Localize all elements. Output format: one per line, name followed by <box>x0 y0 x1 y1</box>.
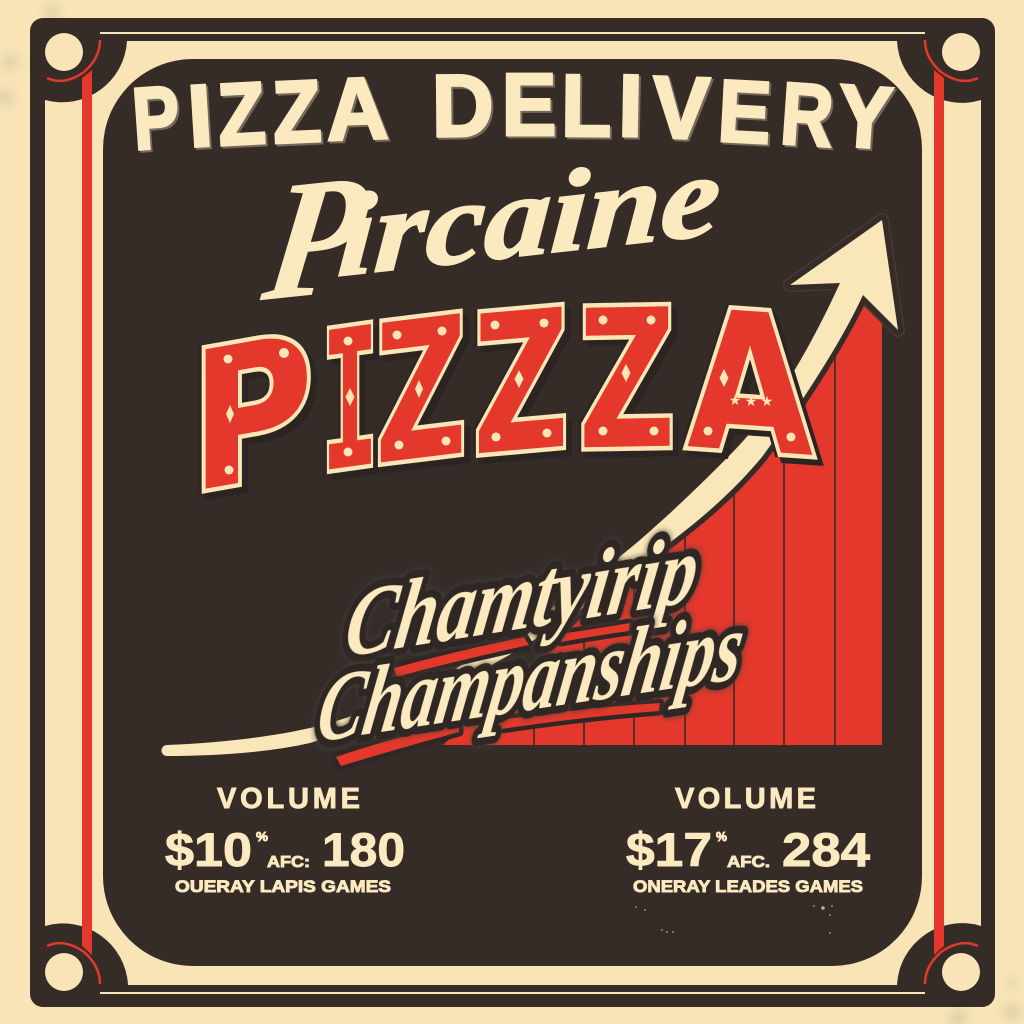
title: PIZZA DELIVERY: Z <box>270 61 323 162</box>
red letter faces: Z <box>473 268 569 498</box>
rising bar chart <box>443 290 882 745</box>
stat block left: % <box>256 829 268 844</box>
stat block right: % <box>716 829 727 844</box>
title: PIZZA DELIVERY: Z <box>215 63 268 164</box>
stars on letter A: ★ <box>745 394 757 410</box>
red letter faces: Z <box>376 276 466 509</box>
stat block right: AFC. <box>727 854 770 871</box>
corner: bottom right <box>897 923 981 991</box>
label: VOLUME <box>217 783 360 815</box>
script heading: Pircaine: P <box>254 137 379 337</box>
red side bars <box>82 70 944 955</box>
stars on letter A <box>729 393 773 410</box>
wordmark dots <box>224 316 796 474</box>
script heading: Pircaine <box>254 130 724 337</box>
red letter faces: A <box>688 269 812 500</box>
title: PIZZA DELIVERY: I <box>617 56 644 155</box>
stat block left <box>165 783 405 896</box>
varsity wordmark: PIZZA: P <box>191 294 313 536</box>
stat block right <box>626 783 870 896</box>
stars on letter A: ★ <box>729 393 741 409</box>
title: PIZZA DELIVERY: E <box>716 61 774 162</box>
title: PIZZA DELIVERY: Y <box>835 65 896 168</box>
stars on letter A: ★ <box>761 394 773 410</box>
title: PIZZA DELIVERY: I <box>185 65 215 166</box>
stat block right: 284 <box>782 823 870 876</box>
corner: top right <box>897 33 981 103</box>
red swashes <box>336 623 660 766</box>
red letter faces <box>191 268 812 536</box>
varsity wordmark: PIZZA: A <box>688 269 812 500</box>
title: PIZZA DELIVERY: R <box>778 65 836 166</box>
red letter faces: I <box>321 287 379 515</box>
varsity wordmark: PIZZA <box>191 268 812 536</box>
corner: bottom left <box>45 923 128 991</box>
stat block left: 180 <box>322 823 405 876</box>
frame rules <box>100 32 925 994</box>
caption: OUERAY LAPIS GAMES <box>175 877 391 896</box>
value: $10 <box>165 823 252 876</box>
red letter faces: P <box>191 294 313 536</box>
red letter faces: Z <box>579 269 675 492</box>
stat block left: AFC: <box>267 854 310 871</box>
script line: Champanships: Champanships <box>310 591 752 764</box>
title: PIZZA DELIVERY <box>129 56 896 168</box>
dark central panel <box>103 59 922 966</box>
caption: ONERAY LEADES GAMES <box>633 877 863 896</box>
title: PIZZA DELIVERY: P <box>129 67 183 168</box>
value: $17 <box>626 823 712 876</box>
title: PIZZA DELIVERY: A <box>324 60 389 159</box>
script heading: Pircaine: ircaine <box>334 130 724 302</box>
script line: Chamtyirip: Chamtyirip <box>338 513 707 679</box>
corner: top left <box>45 33 127 102</box>
growth arrow <box>162 220 898 756</box>
panel speckles <box>635 905 833 934</box>
label: VOLUME <box>675 783 816 815</box>
title: PIZZA DELIVERY: V <box>651 59 711 158</box>
title: PIZZA DELIVERY: E <box>502 56 556 155</box>
varsity wordmark: PIZZA: Z <box>473 268 569 498</box>
varsity wordmark: PIZZA: I <box>321 287 379 515</box>
varsity wordmark: PIZZA: Z <box>579 269 675 492</box>
title: PIZZA DELIVERY: D <box>431 58 494 156</box>
varsity wordmark: PIZZA: Z <box>376 276 466 509</box>
title: PIZZA DELIVERY: L <box>561 57 612 156</box>
